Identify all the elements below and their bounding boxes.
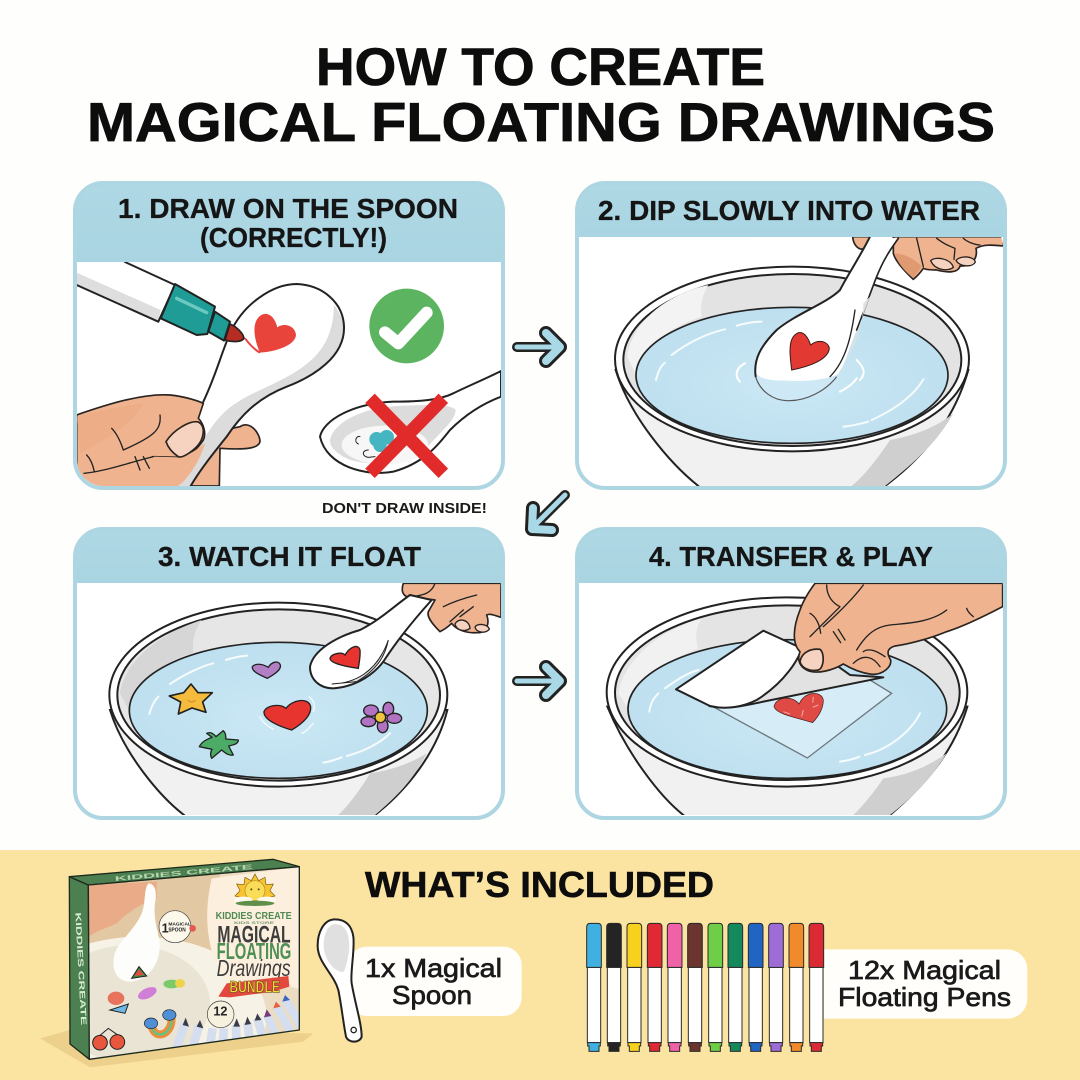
spoon with heart xyxy=(737,237,898,401)
star xyxy=(169,684,212,714)
label text: 12x magical floating pens: Floating Pens xyxy=(838,982,1011,1012)
pen 9 royal blue xyxy=(748,923,763,1051)
spoon with heart xyxy=(310,595,432,688)
badge: 12 pens: 12 xyxy=(213,1005,227,1019)
header: step 4: 4. TRANSFER & PLAY xyxy=(649,541,933,572)
icon: spoon xyxy=(318,919,362,1042)
caption: don't draw inside: DON'T DRAW INSIDE! xyxy=(322,501,487,517)
wet sheet with transferred heart xyxy=(710,680,892,758)
panel: what's included band xyxy=(0,850,1080,1080)
illustration: step 3 xyxy=(109,583,501,833)
title: MAGICAL FLOATING DRAWINGS xyxy=(87,91,995,153)
doodles xyxy=(93,1035,107,1050)
badge: 12 pens xyxy=(207,1001,234,1028)
flower xyxy=(361,702,402,733)
header: step 4 xyxy=(577,529,1005,583)
back finger xyxy=(178,424,261,486)
label text: 1x magical spoon: Spoon xyxy=(392,980,472,1010)
label text: 12x magical floating pens: 12x Magical xyxy=(848,955,1001,985)
panel: step 2 dip into water xyxy=(575,181,1007,503)
pen 11 orange xyxy=(789,923,804,1051)
label pill: spoon xyxy=(348,947,522,1016)
heading: what's included: WHAT’S INCLUDED xyxy=(365,864,714,905)
icon: green check xyxy=(369,289,444,363)
pen 2 black xyxy=(607,923,621,1051)
panel: step 4 transfer and play xyxy=(575,527,1007,833)
pen 6 brown xyxy=(688,923,702,1051)
box sides xyxy=(69,859,299,1059)
header: step 2 xyxy=(577,183,1005,237)
title xyxy=(87,38,995,153)
header: step 3 xyxy=(75,529,503,583)
spoon with heart xyxy=(178,284,344,486)
pens on box xyxy=(172,995,299,1047)
hand xyxy=(402,583,501,633)
label text: 1x magical spoon xyxy=(365,953,502,1010)
arrow: step 2 to step 3 xyxy=(532,495,565,530)
arrow: step 3 to step 4 xyxy=(517,667,560,695)
item: spoon xyxy=(318,919,522,1042)
box front artwork: FLOATING xyxy=(217,938,291,964)
bowl with water xyxy=(615,267,969,503)
header: step 1: (CORRECTLY!) xyxy=(200,222,387,253)
product box xyxy=(40,858,313,1068)
pen 10 purple xyxy=(769,923,783,1051)
hand xyxy=(853,237,1003,279)
arrow: step 1 to step 2 xyxy=(517,333,560,361)
box wordmark: KIDDIES CREATE xyxy=(216,911,292,922)
red heart xyxy=(264,700,311,730)
title: HOW TO CREATE xyxy=(316,38,765,97)
box sides: KIDDIES CREATE xyxy=(73,912,88,1026)
hand xyxy=(794,583,1003,674)
box front artwork: KIDS STORE xyxy=(234,921,276,925)
sun logo xyxy=(234,874,276,906)
illustration: step 4 xyxy=(607,583,1003,833)
purple heart xyxy=(252,662,280,678)
pen 12 red xyxy=(809,923,824,1051)
label text: 12x magical floating pens xyxy=(838,955,1011,1012)
panel: step 3 watch it float xyxy=(73,527,505,833)
box front artwork: MAGICAL xyxy=(217,922,291,949)
badge: 1 magical spoon xyxy=(159,911,196,943)
pen 3 yellow xyxy=(627,923,642,1051)
pen 4 red xyxy=(647,923,662,1051)
header: step 1 xyxy=(75,183,503,262)
marker pen xyxy=(77,262,244,342)
box front artwork xyxy=(88,868,299,1058)
badge: 1 magical spoon: SPOON xyxy=(168,928,186,934)
header: step 1: 1. DRAW ON THE SPOON xyxy=(118,193,458,224)
floating drawings xyxy=(169,662,402,758)
item: twelve pens xyxy=(587,923,1027,1051)
box front artwork: Drawings xyxy=(217,955,291,981)
badge: 1 magical spoon: MAGICAL xyxy=(168,921,191,926)
header: step 2: 2. DIP SLOWLY INTO WATER xyxy=(598,195,980,226)
hand holding spoon xyxy=(77,395,205,486)
spoon on box xyxy=(113,883,160,982)
wrong spoon with red cross xyxy=(320,371,501,473)
box front artwork: BUNDLE xyxy=(229,978,280,997)
illustration: step 2 xyxy=(615,237,1003,503)
illustration: step 1 xyxy=(77,262,501,486)
badge: 1 magical spoon: 1 xyxy=(162,922,169,936)
pen 8 dark green xyxy=(728,923,743,1051)
pen 7 light green xyxy=(708,923,723,1051)
label text: 1x magical spoon: 1x Magical xyxy=(365,953,502,983)
pen 5 pink xyxy=(667,923,682,1051)
lifted paper sheet xyxy=(676,631,883,708)
green splat xyxy=(199,731,238,758)
box sides: KIDDIES CREATE xyxy=(115,864,254,883)
panel: step 1 draw on the spoon xyxy=(73,181,505,490)
bowl with water xyxy=(607,597,967,833)
bowl with water xyxy=(109,603,447,833)
pen 1 blue xyxy=(587,923,601,1051)
label pill: pens xyxy=(824,949,1027,1019)
header: step 3: 3. WATCH IT FLOAT xyxy=(158,541,421,572)
